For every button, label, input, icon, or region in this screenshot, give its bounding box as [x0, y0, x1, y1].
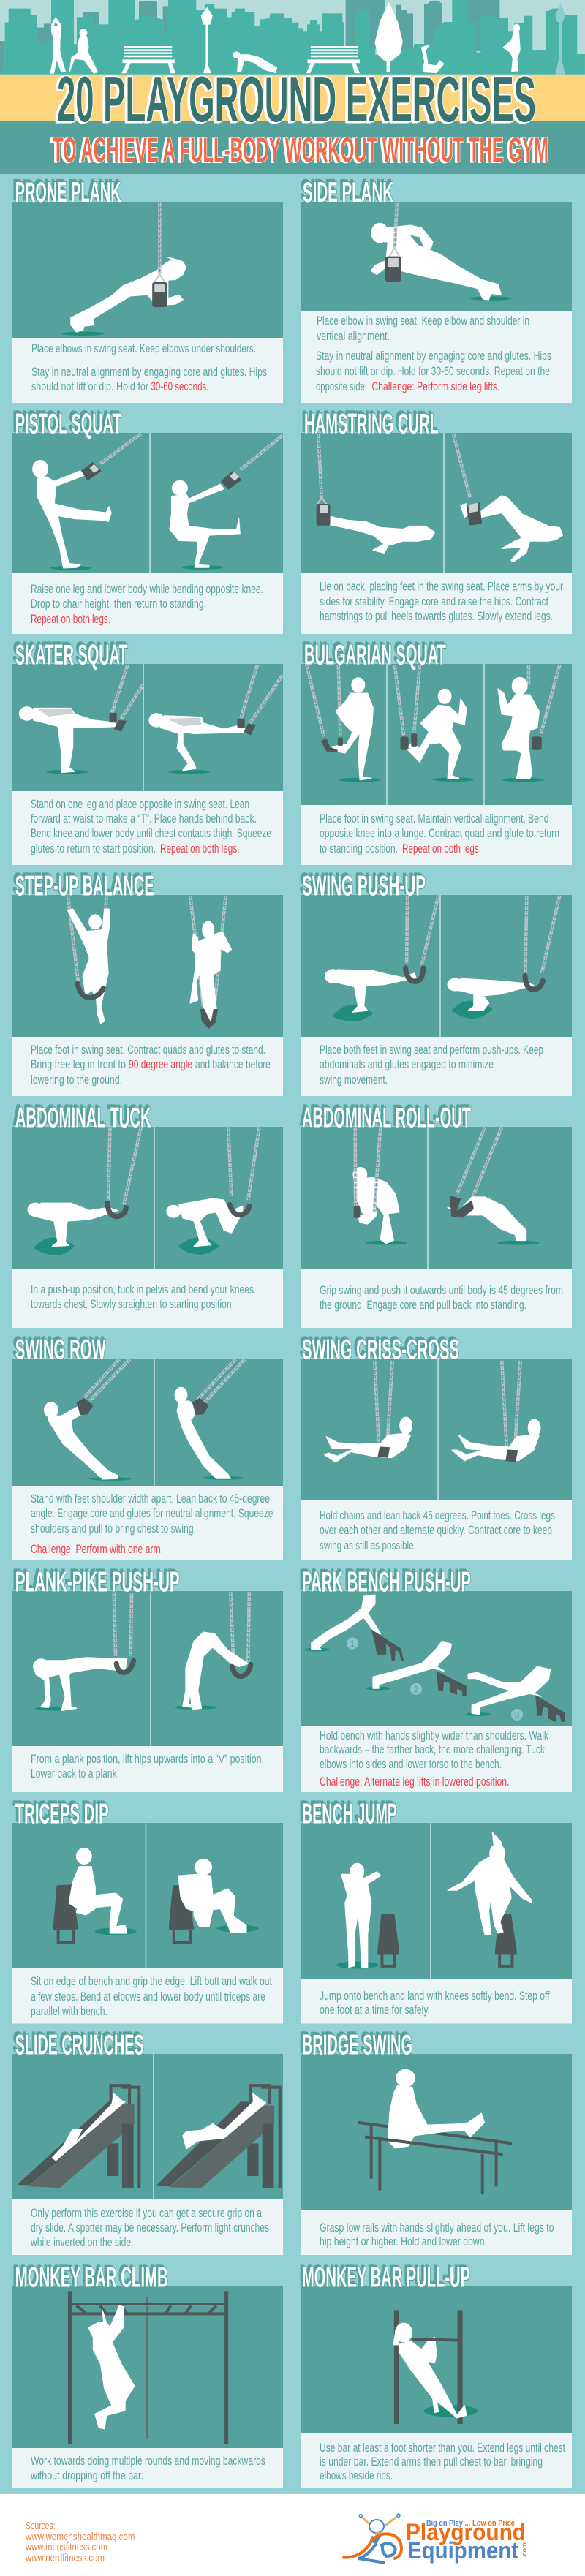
- figure: bench push-up step two: [365, 1642, 467, 1696]
- instructions: Challenge: Perform with one arm.: [31, 1542, 163, 1556]
- instructions: shoulders and pull to bring chest to swing.: [31, 1522, 196, 1536]
- panel: triceps dip: [12, 1799, 283, 2024]
- figure: triceps dip down: [169, 1859, 259, 1942]
- figure: step-up back view: [190, 896, 231, 1029]
- number 3: [511, 1709, 523, 1721]
- figure: bulgarian squat lunge: [395, 665, 474, 782]
- number 1: [347, 1638, 358, 1650]
- instructions: [316, 314, 551, 393]
- instructions: Bend knee and lower body until chest contacts thigh. Squeeze: [31, 826, 271, 840]
- figure: bulgarian squat start: [306, 665, 380, 782]
- heading: SWING ROW: [15, 1334, 106, 1366]
- instructions: parallel with bench.: [31, 2004, 107, 2018]
- skyline right: [292, 0, 585, 75]
- figure: bench jump airborne: [448, 1832, 532, 1966]
- instructions: [31, 582, 263, 626]
- instructions: glutes to return to start position.: [31, 842, 156, 855]
- icon: tree: [375, 3, 402, 72]
- panel: monkey bar climb: [12, 2262, 283, 2488]
- heading: PISTOL SQUAT: [15, 408, 121, 440]
- icon: standing stretch person: [503, 24, 520, 71]
- heading: BENCH JUMP: [302, 1799, 397, 1829]
- heading: BULGARIAN SQUAT: [304, 639, 446, 671]
- teal band: [0, 121, 585, 174]
- figure: bridge swing: [358, 2070, 512, 2194]
- number 1: 1: [350, 1639, 355, 1649]
- icon: child on slide: [342, 2514, 401, 2563]
- instructions: Repeat on both legs.: [160, 842, 240, 855]
- heading: PLANK-PIKE PUSH-UP: [15, 1566, 180, 1598]
- instructions: elbows beside ribs.: [320, 2469, 393, 2482]
- instructions: Place elbows in swing seat. Keep elbows under shoulders.: [31, 341, 256, 355]
- heading: STEP-UP BALANCE: [15, 870, 154, 902]
- heading: SIDE PLANK: [303, 177, 393, 208]
- figure: pistol squat lowered: [170, 435, 283, 570]
- sources: [25, 2520, 135, 2564]
- figure: criss-cross two: [452, 1361, 540, 1462]
- heading: SKATER SQUAT: [15, 639, 128, 671]
- heading: MONKEY BAR CLIMB: [15, 2262, 168, 2293]
- figure: slide crunch flat: [17, 2085, 139, 2188]
- instructions: 30-60 seconds.: [151, 379, 209, 393]
- instructions: Stand with feet shoulder width apart. Lean back to 45-degree: [31, 1492, 270, 1506]
- logo wordmark: [406, 2519, 528, 2564]
- instructions: Work towards doing multiple rounds and moving backwards: [31, 2454, 265, 2468]
- instructions: lowering to the ground.: [31, 1073, 122, 1087]
- logo tagline: [426, 2519, 515, 2528]
- heading: SWING PUSH-UP: [302, 870, 426, 902]
- panel: swing push-up: [301, 870, 572, 1096]
- instructions: swing movement.: [320, 1073, 388, 1087]
- instructions: Bring free leg in front to: [31, 1057, 126, 1071]
- figure: hamstring curl bent: [453, 434, 562, 562]
- instructions: 90 degree angle: [129, 1057, 192, 1071]
- instructions: [31, 341, 267, 393]
- instructions: [320, 1508, 555, 1552]
- instructions: Lower back to a plank.: [31, 1767, 119, 1780]
- instructions: Only perform this exercise if you can get a secure grip on a: [31, 2206, 262, 2220]
- panel: monkey bar pull-up: [301, 2262, 572, 2488]
- instructions: [30, 2206, 269, 2249]
- instructions: opposite side.: [316, 379, 367, 393]
- instructions: one foot at a time for safely.: [320, 2003, 430, 2017]
- panel: side plank: [301, 177, 572, 403]
- figure: step-up raised knee: [68, 896, 110, 1024]
- header banner: [0, 0, 585, 174]
- icon: lunging person: [69, 29, 97, 73]
- panel: bulgarian squat: [301, 639, 572, 865]
- instructions: [31, 1974, 272, 2018]
- figure: swing push-up high: [325, 896, 438, 1021]
- instructions: Raise one leg and lower body while bending opposite knee.: [31, 582, 263, 596]
- figure: bench push-up step three: [466, 1666, 565, 1722]
- figure: slide crunch raised: [156, 2085, 280, 2188]
- instructions: [320, 2221, 554, 2248]
- instructions: [320, 1283, 563, 1312]
- instructions: [31, 1283, 254, 1311]
- logo wordmark: .com: [521, 2542, 528, 2558]
- figure: roll-out standing: [353, 1127, 407, 1244]
- instructions: [31, 1492, 273, 1556]
- heading: BRIDGE SWING: [302, 2030, 412, 2061]
- icon: park bench: [306, 46, 360, 73]
- heading: SLIDE CRUNCHES: [15, 2030, 144, 2061]
- panel: plank-pike push-up: [12, 1566, 283, 1792]
- logo tagline: Big on Play ...: [426, 2519, 470, 2528]
- instructions: [320, 2441, 565, 2482]
- panel: abdominal roll-out: [301, 1103, 572, 1328]
- instructions: abdominals and glutes engaged to minimize: [320, 1057, 494, 1071]
- instructions: angle. Engage core and glutes for neutral alignment. Squeeze: [31, 1506, 273, 1520]
- instructions: Challenge: Perform side leg lifts.: [371, 379, 500, 393]
- figure: plank: [34, 1592, 134, 1711]
- panel: park bench push-up: [301, 1566, 572, 1792]
- logo wordmark: Playground: [406, 2519, 526, 2545]
- instructions: hip height or higher. Hold and lower down.: [320, 2235, 487, 2248]
- instructions: Challenge: Alternate leg lifts in lowered position.: [320, 1775, 509, 1789]
- figure: tuck extended: [28, 1127, 141, 1255]
- figure: swing push-up low: [448, 896, 559, 1019]
- panel: abdominal tuck: [12, 1103, 283, 1328]
- number 3: 3: [515, 1710, 520, 1720]
- logo wordmark: Equipment: [407, 2537, 518, 2564]
- icon: sit-up person: [422, 45, 444, 72]
- icon: push-up person: [233, 52, 276, 72]
- instructions: without dropping off the bar.: [30, 2469, 143, 2482]
- figure: prone plank: [62, 203, 186, 336]
- instructions: [320, 1989, 550, 2017]
- instructions: dry slide. A spotter may be necessary. Perform light crunches: [31, 2221, 269, 2235]
- figure: monkey bar pull-up: [393, 2310, 478, 2424]
- instructions: Stand on one leg and place opposite in swing seat. Lean: [31, 797, 249, 811]
- instructions: forward at waist to make a “T”. Place hands behind back.: [31, 812, 257, 826]
- figure: skater squat start: [20, 665, 143, 774]
- panel: slide crunches: [12, 2030, 283, 2255]
- figure: roll-out extended: [448, 1127, 540, 1244]
- panel: swing criss-cross: [301, 1334, 572, 1560]
- icon: stretching person: [50, 18, 65, 73]
- figure: skater squat lowered: [149, 665, 283, 774]
- sources: www.nerdfitness.com: [25, 2552, 105, 2564]
- logo tagline: Low on Price: [472, 2519, 515, 2528]
- instructions: Sit on edge of bench and grip the edge. Lift butt and walk out: [31, 1974, 272, 1988]
- heading: PRONE PLANK: [15, 177, 121, 208]
- figure: side plank: [371, 203, 511, 301]
- figure: bulgarian squat raised knee: [498, 665, 559, 782]
- skyline left: [0, 0, 292, 75]
- panel: skater squat: [12, 639, 283, 865]
- heading: ABDOMINAL TUCK: [15, 1103, 151, 1133]
- icon: park bench: [122, 46, 176, 73]
- figure: monkey bar climb: [70, 2291, 226, 2444]
- panel: prone plank: [12, 177, 283, 403]
- figure: criss-cross one: [325, 1361, 412, 1462]
- figure: hamstring curl extended: [317, 434, 434, 553]
- heading: TRICEPS DIP: [15, 1799, 109, 1829]
- instructions: while inverted on the side.: [30, 2235, 133, 2249]
- instructions: swing as still as possible.: [320, 1538, 416, 1552]
- instructions: Stay in neutral alignment by engaging core and glutes. Hips: [31, 365, 267, 379]
- figure: bench jump standing: [336, 1864, 399, 1968]
- instructions: In a push-up position, tuck in pelvis and bend your knees: [31, 1283, 254, 1296]
- figure: pistol squat standing: [33, 434, 141, 570]
- instructions: From a plank position, lift hips upwards into a “V” position.: [31, 1752, 264, 1766]
- panel: swing row: [12, 1334, 283, 1560]
- number 2: [410, 1683, 422, 1695]
- instructions: elbows into sides and lower torso to the bench.: [320, 1757, 502, 1771]
- figure: swing row leaning: [45, 1359, 132, 1481]
- sources: www.mensfitness.com: [25, 2541, 107, 2553]
- instructions: [320, 1729, 548, 1789]
- instructions: [320, 579, 563, 623]
- park silhouettes right: [306, 3, 565, 75]
- panel: hamstring curl: [301, 408, 572, 634]
- figure: swing row pulled: [175, 1359, 245, 1480]
- instructions: [31, 797, 271, 855]
- number 2: 2: [414, 1685, 419, 1695]
- instructions: [31, 1043, 271, 1087]
- panel: bench jump: [301, 1799, 572, 2024]
- figure: triceps dip up: [53, 1848, 137, 1942]
- instructions: towards chest. Slowly straighten to starting position.: [31, 1297, 234, 1311]
- figure: bench push-up step one: [305, 1595, 404, 1661]
- instructions: [320, 1043, 543, 1087]
- instructions: [320, 812, 559, 855]
- instructions: should not lift or dip. Hold for: [31, 379, 148, 393]
- yellow band: [0, 75, 585, 121]
- icon: far lamp post: [555, 4, 565, 75]
- instructions: vertical alignment.: [317, 329, 390, 343]
- heading: HAMSTRING CURL: [304, 408, 439, 440]
- instructions: Repeat on both legs.: [31, 612, 110, 626]
- instructions: Repeat on both legs.: [402, 842, 481, 855]
- instructions: and balance before: [195, 1057, 271, 1071]
- sources: www.womenshealthmag.com: [25, 2531, 135, 2543]
- panel: step-up balance: [12, 870, 283, 1096]
- logo: Playground Equipment: [342, 2514, 528, 2564]
- instructions: Drop to chair height, then return to standing.: [31, 597, 206, 611]
- instructions: Place foot in swing seat. Contract quads and glutes to stand.: [31, 1043, 265, 1057]
- panel: bridge swing: [301, 2030, 572, 2255]
- park silhouettes left: [50, 7, 276, 73]
- icon: lamp post: [201, 7, 213, 73]
- figure: pike: [175, 1592, 251, 1710]
- instructions: a few steps. Bend at elbows and lower body until triceps are: [31, 1990, 265, 2003]
- panel: pistol squat: [12, 408, 283, 634]
- instructions: [30, 2454, 265, 2482]
- instructions: to standing position.: [320, 842, 398, 855]
- instructions: [31, 1752, 264, 1780]
- sources: Sources:: [26, 2520, 56, 2532]
- figure: tuck knees in: [167, 1127, 260, 1255]
